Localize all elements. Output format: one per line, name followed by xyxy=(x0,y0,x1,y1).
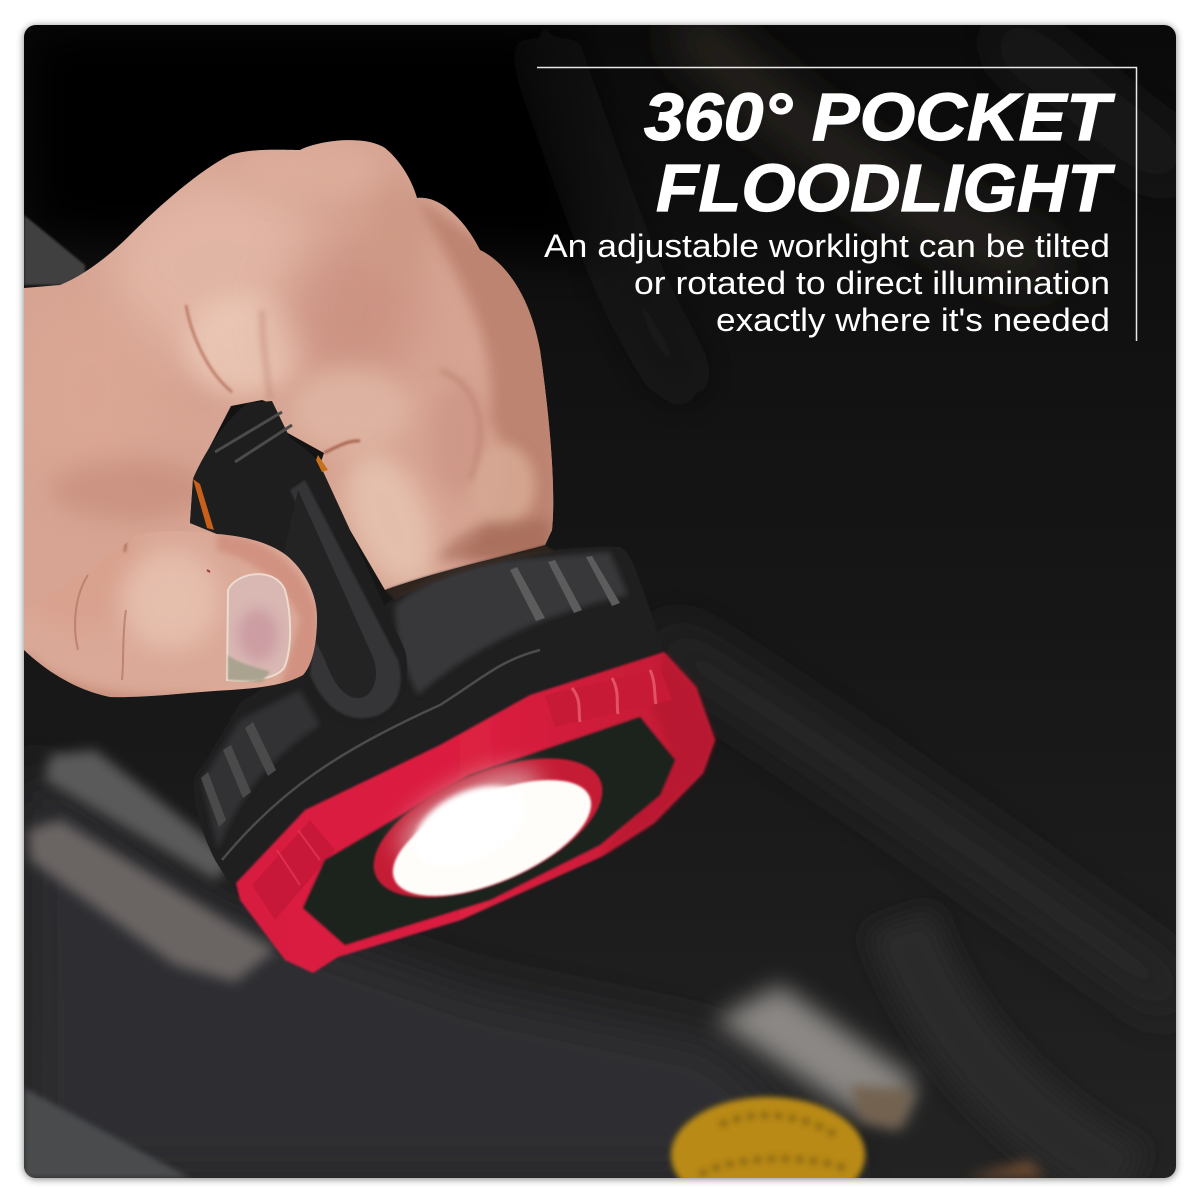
blurred bottle and cap xyxy=(671,985,1045,1200)
finger creases xyxy=(186,305,232,392)
title: FLOODLIGHT xyxy=(656,151,1115,226)
recessed dark face xyxy=(303,717,675,945)
title: 360° POCKET xyxy=(644,80,1115,155)
red bumper xyxy=(236,652,715,973)
body seam xyxy=(222,650,540,860)
knuckle creases xyxy=(75,575,126,680)
textured handle rail xyxy=(290,480,401,718)
title xyxy=(644,80,1115,226)
flashlight body xyxy=(198,546,650,878)
blurred labels in engine bay xyxy=(28,750,275,982)
lens xyxy=(372,754,604,900)
bumper grips xyxy=(545,668,672,727)
upper finger tip shadow at body xyxy=(385,545,555,600)
nail xyxy=(227,574,290,681)
title frame xyxy=(537,68,1136,341)
description text: An adjustable worklight can be tilted xyxy=(544,228,1110,264)
shaded knuckles on far fingers xyxy=(417,198,560,560)
grip ribs lower xyxy=(201,722,276,827)
thumb xyxy=(24,532,317,698)
description text xyxy=(544,228,1110,338)
description text: exactly where it's needed xyxy=(716,302,1110,338)
upper grey band xyxy=(395,552,628,695)
grip ribs upper xyxy=(510,556,620,621)
handle bail xyxy=(190,401,407,727)
hand: fingers and palm xyxy=(24,140,554,610)
description text: or rotated to direct illumination xyxy=(634,265,1110,301)
